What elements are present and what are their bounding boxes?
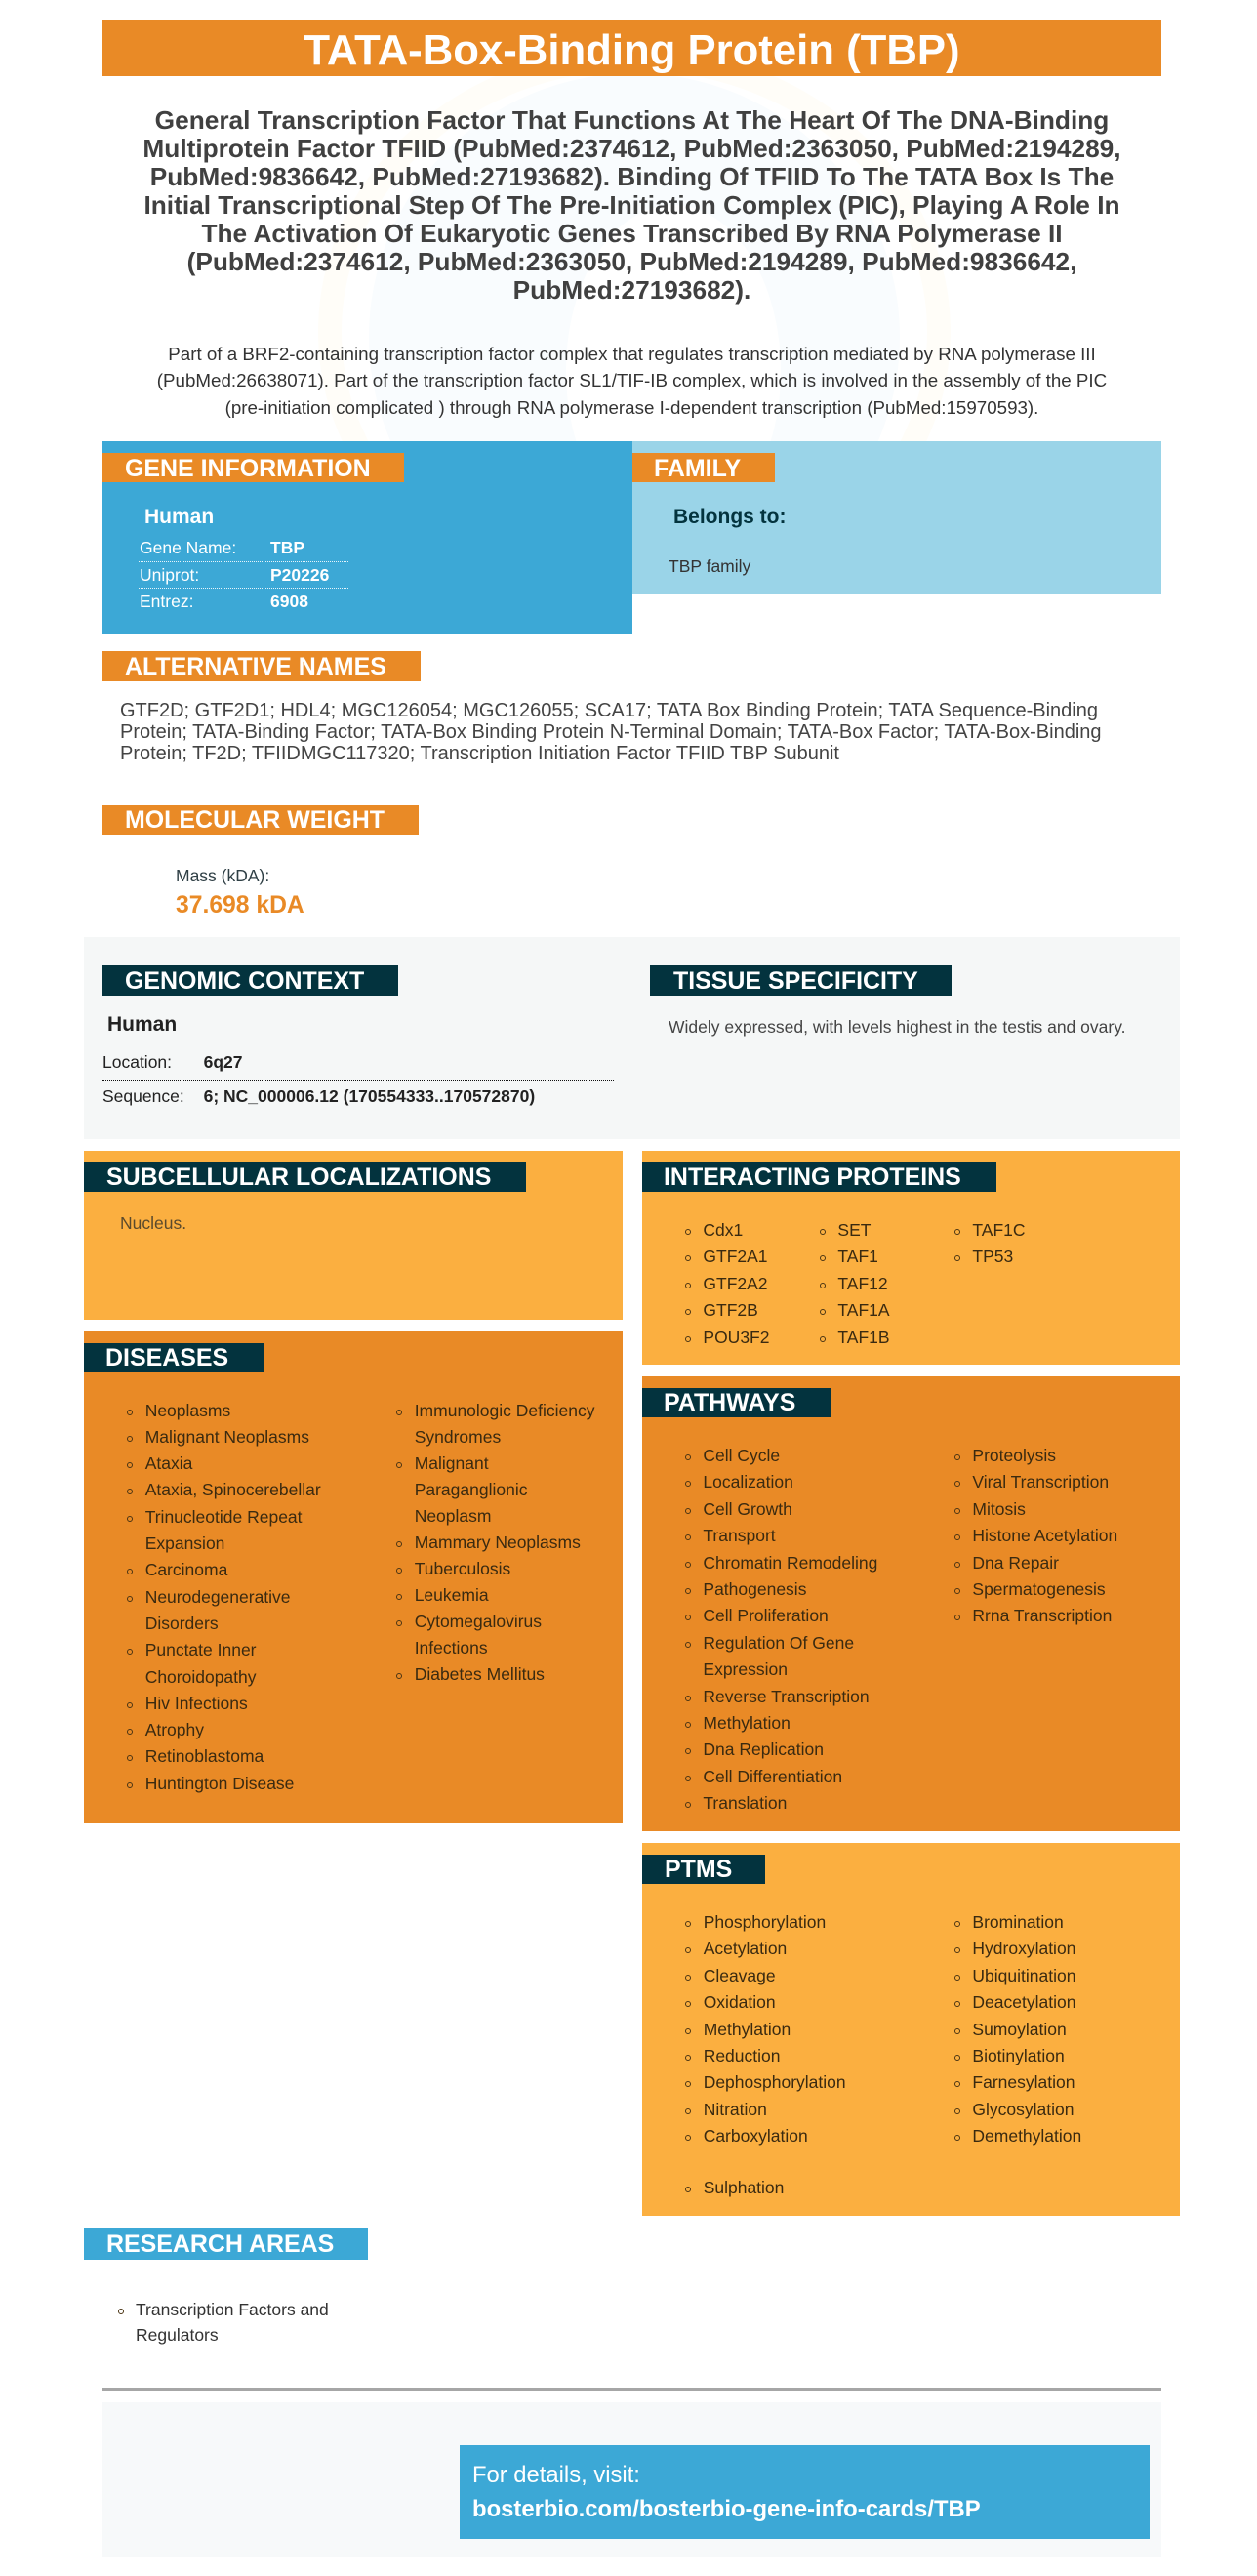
list column 1: Atrophy bbox=[145, 1720, 204, 1739]
panel: interacting proteins bbox=[642, 1151, 1180, 1365]
uniprot row: P20226 bbox=[270, 565, 329, 585]
list column 2: TAF12 bbox=[837, 1274, 888, 1293]
family value: TBP family bbox=[669, 556, 750, 576]
heading: tissue specificity: TISSUE SPECIFICITY bbox=[673, 967, 918, 995]
list column 1: Sulphation bbox=[704, 2178, 784, 2197]
list column 2: Ubiquitination bbox=[972, 1966, 1075, 1985]
list column 2: Leukemia bbox=[415, 1585, 489, 1605]
list column 1: Dna Replication bbox=[703, 1739, 824, 1759]
list column 1: Cell Cycle bbox=[703, 1446, 780, 1465]
list column 2: TAF1 bbox=[837, 1247, 878, 1266]
list column 1: Localization bbox=[703, 1472, 793, 1492]
list column 2 bbox=[396, 1401, 595, 1684]
list column 2: Biotinylation bbox=[972, 2046, 1065, 2065]
title bbox=[102, 20, 1161, 76]
list column 2: Histone Acetylation bbox=[972, 1526, 1117, 1545]
list column 1: Expression bbox=[703, 1659, 788, 1679]
list column 1: Punctate Inner bbox=[145, 1640, 257, 1659]
research areas list: Transcription Factors and bbox=[136, 2300, 329, 2319]
list column 2: Malignant bbox=[415, 1453, 489, 1473]
subtitle: function summary: PubMed:9836642, PubMed:27193682). Binding Of TFIID To The TATA Box Is The bbox=[150, 162, 1114, 191]
heading: genomic context: GENOMIC CONTEXT bbox=[125, 967, 364, 995]
sequence row: Sequence: bbox=[102, 1086, 184, 1106]
list column 2: Rrna Transcription bbox=[972, 1606, 1112, 1625]
list column 2 bbox=[954, 1446, 1117, 1625]
list column 2: Proteolysis bbox=[972, 1446, 1056, 1465]
localization text: Nucleus. bbox=[120, 1213, 186, 1233]
mass label: Mass (kDA): bbox=[176, 866, 269, 885]
list column 2: Mitosis bbox=[972, 1499, 1026, 1519]
sequence row: 6; NC_000006.12 (170554333..170572870) bbox=[204, 1086, 535, 1106]
description paragraph: Part of a BRF2-containing transcription factor complex that regulates transcription mediated by RNA polymerase III bbox=[168, 344, 1096, 363]
list column 3: TP53 bbox=[972, 1247, 1013, 1266]
description paragraph: (pre-initiation complicated ) through RNA polymerase I-dependent transcription (PubMed:15970593). bbox=[225, 397, 1038, 418]
location row: Location: bbox=[102, 1052, 172, 1072]
list column 1: GTF2A2 bbox=[703, 1274, 768, 1293]
list column 1: Cell Differentiation bbox=[703, 1767, 842, 1786]
list column 2: Viral Transcription bbox=[972, 1472, 1109, 1492]
list column 1: Expansion bbox=[145, 1533, 224, 1553]
panel: PTMs bbox=[642, 1843, 1180, 2216]
list column 1: Translation bbox=[703, 1793, 787, 1813]
panel: pathways bbox=[642, 1376, 1180, 1831]
list column 1: Phosphorylation bbox=[704, 1912, 826, 1932]
list column 2: TAF1B bbox=[837, 1328, 890, 1347]
list column 2: TAF1A bbox=[837, 1300, 890, 1320]
heading: diseases: DISEASES bbox=[105, 1344, 228, 1371]
list column 2: Diabetes Mellitus bbox=[415, 1664, 545, 1684]
heading: gene information: GENE INFORMATION bbox=[125, 455, 371, 482]
list column 2: SET bbox=[837, 1220, 871, 1240]
list column 1: Neurodegenerative bbox=[145, 1587, 291, 1607]
list column 2: Tuberculosis bbox=[415, 1559, 510, 1578]
list column 2: Mammary Neoplasms bbox=[415, 1533, 581, 1552]
list column 1: Trinucleotide Repeat bbox=[145, 1507, 303, 1527]
alternative names text: GTF2D; GTF2D1; HDL4; MGC126054; MGC126055; SCA17; TATA Box Binding Protein; TATA Sequence-Binding bbox=[120, 700, 1098, 721]
heading: research areas: RESEARCH AREAS bbox=[106, 2230, 334, 2258]
title: TATA-Box-Binding Protein (TBP) bbox=[304, 26, 960, 74]
list column 1: Methylation bbox=[703, 1713, 791, 1733]
heading: family: FAMILY bbox=[654, 455, 741, 482]
list column 2: Farnesylation bbox=[972, 2072, 1075, 2092]
list column 1: Reduction bbox=[704, 2046, 781, 2065]
list column 1: Acetylation bbox=[704, 1939, 787, 1958]
subtitle: function summary: Multiprotein Factor TFIID (PubMed:2374612, PubMed:2363050, PubMed:2194289, bbox=[142, 134, 1121, 163]
list column 1 bbox=[685, 1220, 769, 1347]
entrez row: Entrez: bbox=[140, 592, 193, 611]
species label: Human bbox=[144, 506, 214, 528]
heading: pathways: PATHWAYS bbox=[664, 1389, 795, 1416]
heading: alternative names: ALTERNATIVE NAMES bbox=[125, 653, 386, 680]
heading: PTMs bbox=[642, 1855, 765, 1884]
list column 2: Neoplasm bbox=[415, 1506, 491, 1526]
list column 3 bbox=[954, 1220, 1026, 1266]
list column 1 bbox=[127, 1401, 321, 1793]
heading: PTMs: PTMS bbox=[665, 1856, 732, 1883]
list column 2 bbox=[954, 1912, 1081, 2146]
mass value: 37.698 kDA bbox=[176, 892, 304, 919]
list column 2: Bromination bbox=[972, 1912, 1064, 1932]
heading: subcellular localizations: SUBCELLULAR LOCALIZATIONS bbox=[106, 1164, 491, 1191]
research areas list bbox=[118, 2300, 329, 2345]
list column 1: Reverse Transcription bbox=[703, 1687, 870, 1706]
subtitle: function summary: PubMed:27193682). bbox=[513, 275, 750, 305]
list column 1 bbox=[685, 1446, 877, 1813]
location row bbox=[102, 1052, 242, 1072]
list column 1: Neoplasms bbox=[145, 1401, 230, 1420]
callout: details link bbox=[460, 2445, 1150, 2539]
list column 2: Infections bbox=[415, 1638, 488, 1657]
list column 2: Paraganglionic bbox=[415, 1480, 527, 1499]
belongs to label: Belongs to: bbox=[673, 506, 787, 528]
entrez row: 6908 bbox=[270, 592, 308, 611]
list column 1: Disorders bbox=[145, 1614, 219, 1633]
heading: family bbox=[632, 453, 775, 482]
subtitle: function summary: The Activation Of Eukaryotic Genes Transcribed By RNA Polymerase II bbox=[201, 219, 1063, 248]
list column 1: Transport bbox=[703, 1526, 776, 1545]
list column 2: Syndromes bbox=[415, 1427, 501, 1447]
list column 1: Cdx1 bbox=[703, 1220, 743, 1240]
list column 1: Regulation Of Gene bbox=[703, 1633, 854, 1653]
list column 1: POU3F2 bbox=[703, 1328, 769, 1347]
list column 2: Sumoylation bbox=[972, 2020, 1067, 2039]
tissue specificity text: Widely expressed, with levels highest in the testis and ovary. bbox=[669, 1017, 1126, 1037]
list column 3: TAF1C bbox=[972, 1220, 1026, 1240]
list column 1: Cell Growth bbox=[703, 1499, 792, 1519]
heading: molecular weight: MOLECULAR WEIGHT bbox=[125, 806, 385, 834]
list column 1: GTF2B bbox=[703, 1300, 758, 1320]
panel: diseases bbox=[84, 1331, 623, 1823]
subtitle: function summary bbox=[142, 105, 1121, 305]
list column 2 bbox=[820, 1220, 890, 1347]
heading: interacting proteins: INTERACTING PROTEINS bbox=[664, 1164, 961, 1191]
callout label: For details, visit: bbox=[472, 2462, 640, 2488]
list column 2: Demethylation bbox=[972, 2126, 1081, 2146]
species label: Human bbox=[107, 1013, 177, 1036]
list column 1: Chromatin Remodeling bbox=[703, 1553, 877, 1573]
list column 1: Choroidopathy bbox=[145, 1667, 257, 1687]
uniprot row bbox=[140, 565, 329, 585]
list column 1: Nitration bbox=[704, 2100, 767, 2119]
list column 1: Methylation bbox=[704, 2020, 791, 2039]
list column 1: Ataxia bbox=[145, 1453, 192, 1473]
description paragraph bbox=[157, 344, 1107, 418]
list column 1: GTF2A1 bbox=[703, 1247, 768, 1266]
list column 1: Malignant Neoplasms bbox=[145, 1427, 309, 1447]
list column 2: Deacetylation bbox=[972, 1992, 1075, 2012]
subtitle: function summary: Initial Transcriptional Step Of The Pre-Initiation Complex (PIC), Playing A Role In bbox=[143, 190, 1120, 220]
description paragraph: (PubMed:26638071). Part of the transcription factor SL1/TIF-IB complex, which is involved in the assembly of the PIC bbox=[157, 370, 1107, 390]
list column 1: Ataxia, Spinocerebellar bbox=[145, 1480, 321, 1499]
panel: subcellular localizations bbox=[84, 1151, 623, 1320]
panel: family bbox=[632, 441, 1161, 594]
panel: footer bbox=[102, 2402, 1161, 2557]
list column 1: Retinoblastoma bbox=[145, 1746, 264, 1766]
subtitle: function summary: General Transcription Factor That Functions At The Heart Of The DNA-Binding bbox=[155, 105, 1109, 135]
list column 2: Glycosylation bbox=[972, 2100, 1074, 2119]
list column 1: Cleavage bbox=[704, 1966, 776, 1985]
list column 2: Hydroxylation bbox=[972, 1939, 1075, 1958]
list column 1: Oxidation bbox=[704, 1992, 776, 2012]
subtitle: function summary: (PubMed:2374612, PubMed:2363050, PubMed:2194289, PubMed:9836642, bbox=[187, 247, 1076, 276]
list column 1: Carcinoma bbox=[145, 1560, 227, 1579]
list column 1 bbox=[685, 1912, 846, 2197]
list column 2: Immunologic Deficiency bbox=[415, 1401, 594, 1420]
list column 2: Cytomegalovirus bbox=[415, 1612, 542, 1631]
gene name row: TBP bbox=[270, 538, 304, 557]
alternative names text: Protein; TATA-Binding Factor; TATA-Box Binding Protein N-Terminal Domain; TATA-Box Factor; TATA-Box-Binding bbox=[120, 721, 1102, 743]
heading: diseases bbox=[84, 1343, 264, 1372]
gene name row: Gene Name: bbox=[140, 538, 236, 557]
list column 1: Hiv Infections bbox=[145, 1694, 248, 1713]
list column 1: Carboxylation bbox=[704, 2126, 808, 2146]
heading: pathways bbox=[642, 1388, 831, 1417]
panel: gene information bbox=[102, 441, 632, 634]
panel: genomic context and tissue specificity bbox=[84, 937, 1180, 1139]
list column 2: Spermatogenesis bbox=[972, 1579, 1106, 1599]
research areas list: Regulators bbox=[136, 2325, 219, 2345]
list column 1: Huntington Disease bbox=[145, 1774, 294, 1793]
entrez row bbox=[140, 592, 308, 611]
uniprot row: Uniprot: bbox=[140, 565, 199, 585]
list column 2: Dna Repair bbox=[972, 1553, 1059, 1573]
location row: 6q27 bbox=[204, 1052, 242, 1072]
alternative names text bbox=[120, 700, 1102, 764]
list column 1: Dephosphorylation bbox=[704, 2072, 846, 2092]
gene name row bbox=[140, 538, 304, 557]
callout url: bosterbio.com/bosterbio-gene-info-cards/TBP bbox=[472, 2496, 981, 2522]
list column 1: Pathogenesis bbox=[703, 1579, 806, 1599]
watermark logo bbox=[0, 0, 1257, 449]
alternative names text: Protein; TF2D; TFIIDMGC117320; Transcription Initiation Factor TFIID TBP Subunit bbox=[120, 743, 839, 764]
list column 1: Cell Proliferation bbox=[703, 1606, 829, 1625]
